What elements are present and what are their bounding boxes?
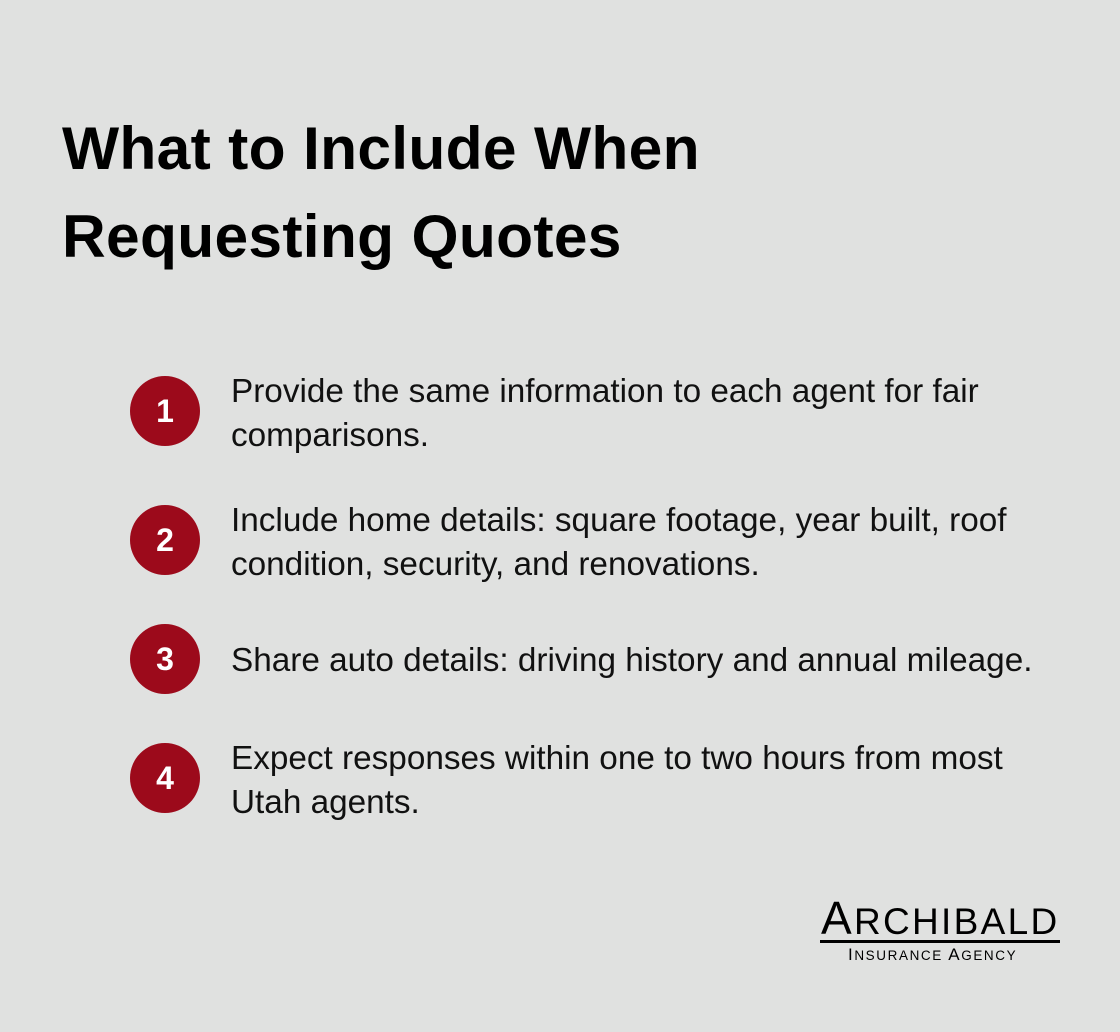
text 2: Include home details: square footage, year built, roof	[231, 502, 1007, 539]
circle 3	[130, 624, 200, 694]
title	[62, 114, 700, 270]
item 4	[130, 740, 1003, 821]
circle 4	[130, 743, 200, 813]
logo: ARCHIBALD	[821, 892, 1059, 944]
text 2	[231, 502, 1007, 583]
circle 4: 4	[156, 760, 174, 796]
title: What to Include When	[62, 114, 700, 182]
circle 2: 2	[156, 522, 174, 558]
text 4	[231, 740, 1003, 821]
item 1	[130, 373, 979, 454]
circle 3: 3	[156, 641, 174, 677]
text 2: condition, security, and renovations.	[231, 546, 760, 583]
item 2	[130, 502, 1007, 583]
text 3: Share auto details: driving history and annual mileage.	[231, 642, 1032, 679]
text 1: comparisons.	[231, 417, 429, 454]
circle 2	[130, 505, 200, 575]
logo: INSURANCE AGENCY	[848, 945, 1017, 964]
circle 1: 1	[156, 393, 174, 429]
title: Requesting Quotes	[62, 202, 622, 270]
circle 1	[130, 376, 200, 446]
item 3	[130, 624, 1032, 694]
text 4: Expect responses within one to two hours from most	[231, 740, 1003, 777]
text 4: Utah agents.	[231, 784, 420, 821]
text 1	[231, 373, 979, 454]
text 1: Provide the same information to each agent for fair	[231, 373, 979, 410]
